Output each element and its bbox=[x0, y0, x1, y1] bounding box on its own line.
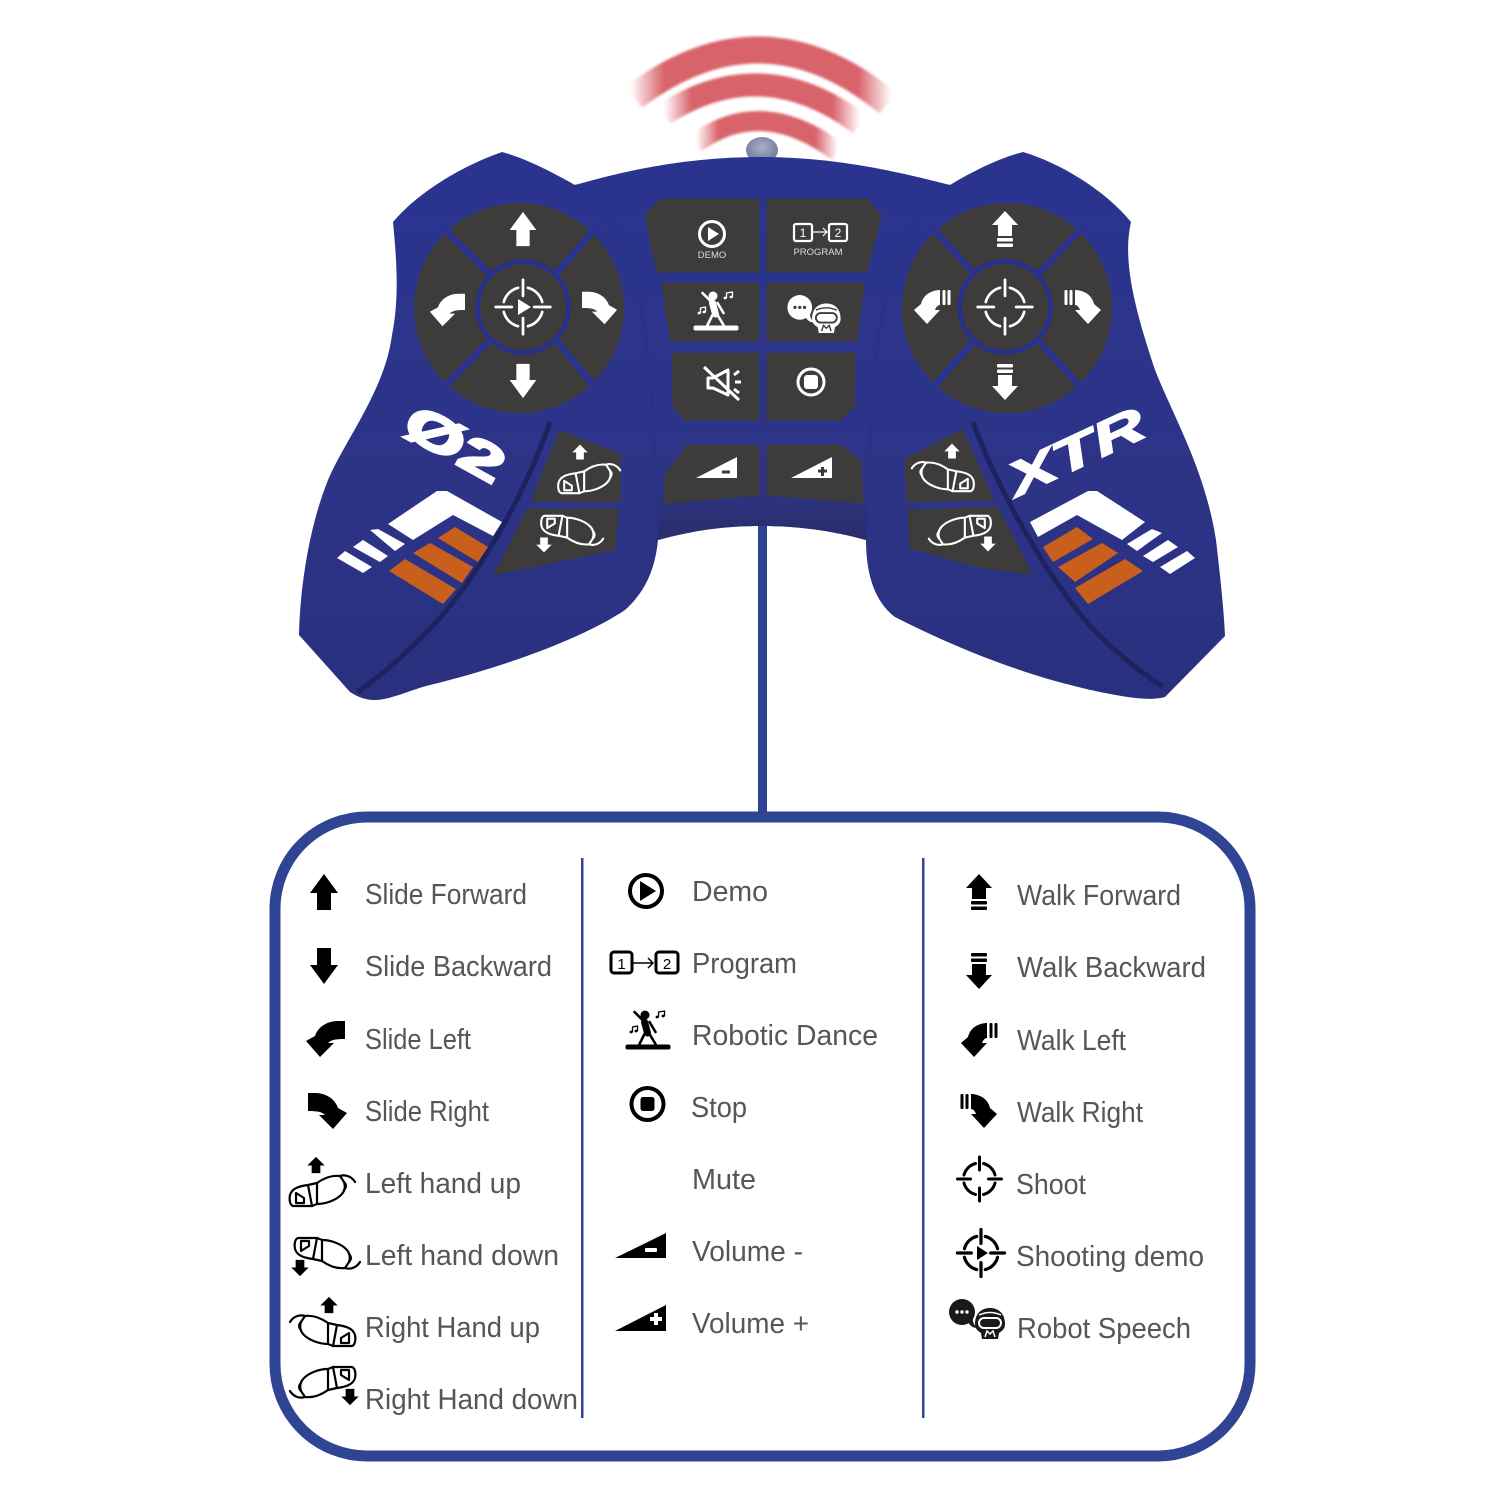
label: shooting demo: Shooting demo bbox=[1016, 1241, 1204, 1273]
right D-pad bbox=[902, 203, 1112, 413]
logo: 02: Ø2 bbox=[395, 394, 515, 495]
icon: walk backward bbox=[966, 953, 992, 989]
legend column: slide and hands bbox=[290, 874, 578, 1416]
icon: program: 2 bbox=[663, 956, 671, 973]
label: robot speech: Robot Speech bbox=[1017, 1313, 1191, 1345]
icon: slide left bbox=[306, 1021, 345, 1057]
icon: slide backward bbox=[510, 364, 536, 398]
label: slide forward: Slide Forward bbox=[365, 879, 527, 911]
left grip groove bbox=[358, 422, 550, 692]
label: slide left: Slide Left bbox=[365, 1024, 471, 1056]
label: mute: Mute bbox=[692, 1164, 756, 1196]
legend column: walk and shoot bbox=[949, 874, 1206, 1345]
connector line bbox=[758, 520, 767, 816]
icon: walk right bbox=[960, 1094, 997, 1128]
label: slide backward: Slide Backward bbox=[365, 951, 552, 983]
controller bbox=[299, 152, 1225, 700]
label: walk backward: Walk Backward bbox=[1017, 952, 1206, 984]
right grip groove bbox=[973, 422, 1163, 687]
icon: shooting demo bbox=[496, 280, 550, 334]
label: left hand up: Left hand up bbox=[365, 1168, 521, 1200]
icon: shoot bbox=[978, 280, 1032, 334]
icon: shoot bbox=[958, 1157, 1002, 1201]
label: volume up: Volume + bbox=[692, 1308, 809, 1340]
legend column: functions bbox=[611, 875, 878, 1340]
LED emitter bbox=[746, 137, 778, 163]
program button: 1 bbox=[800, 226, 807, 240]
icon: volume up bbox=[615, 1305, 666, 1331]
program button bbox=[768, 200, 880, 271]
label: slide right: Slide Right bbox=[365, 1096, 489, 1128]
label: shoot: Shoot bbox=[1016, 1169, 1086, 1201]
icon: slide right bbox=[308, 1093, 347, 1129]
demo button: DEMO bbox=[698, 250, 726, 261]
label: stop: Stop bbox=[691, 1092, 747, 1124]
right stripes bbox=[1030, 491, 1195, 604]
label: left hand down: Left hand down bbox=[365, 1240, 559, 1272]
program button: 2 bbox=[835, 226, 842, 240]
label: walk forward: Walk Forward bbox=[1017, 880, 1181, 912]
centre underside shade bbox=[658, 480, 866, 540]
label: right hand up: Right Hand up bbox=[365, 1312, 540, 1344]
icon: walk backward bbox=[992, 364, 1018, 400]
icon: walk forward bbox=[966, 874, 992, 910]
volume up button bbox=[768, 446, 862, 502]
label: program: Program bbox=[692, 948, 797, 980]
label: walk right: Walk Right bbox=[1017, 1097, 1143, 1129]
icon: left hand down bbox=[291, 1238, 360, 1276]
icon: walk right bbox=[1064, 290, 1101, 324]
icon: shooting demo bbox=[957, 1229, 1005, 1277]
icon: program bbox=[611, 952, 678, 973]
icon: program: 1 bbox=[617, 956, 626, 973]
icon: slide right bbox=[582, 292, 617, 324]
controller body bbox=[299, 152, 1225, 700]
label: walk left: Walk Left bbox=[1017, 1025, 1126, 1057]
left hand down button bbox=[496, 510, 617, 573]
logo: XTR: XTR bbox=[996, 397, 1153, 508]
icon: left hand up bbox=[290, 1157, 355, 1206]
legend panel frame bbox=[275, 817, 1250, 1456]
robot speech button bbox=[768, 284, 863, 340]
icon: slide backward bbox=[310, 948, 338, 984]
mute button bbox=[673, 354, 758, 419]
column divider left bbox=[581, 858, 584, 1418]
icon: robot speech bbox=[949, 1299, 1005, 1339]
icon: volume down bbox=[615, 1233, 666, 1258]
column divider right bbox=[922, 858, 924, 1418]
demo button bbox=[646, 200, 758, 271]
icon: stop bbox=[632, 1088, 664, 1120]
label: right hand down: Right Hand down bbox=[365, 1384, 578, 1416]
icon: walk forward bbox=[992, 211, 1018, 247]
icon: right hand down bbox=[290, 1367, 359, 1405]
volume down button bbox=[666, 446, 758, 502]
left hand up button bbox=[533, 432, 620, 501]
label: robotic dance: Robotic Dance bbox=[692, 1020, 878, 1052]
icon: slide left bbox=[430, 294, 465, 326]
robotic dance button bbox=[663, 284, 758, 340]
signal waves bbox=[634, 50, 888, 152]
icon: walk left bbox=[961, 1023, 998, 1057]
icon: slide forward bbox=[310, 874, 338, 910]
icon: right hand up bbox=[290, 1297, 355, 1346]
label: volume down: Volume - bbox=[692, 1236, 803, 1268]
icon: walk left bbox=[914, 290, 950, 324]
program button: PROGRAM bbox=[793, 247, 843, 258]
label: demo: Demo bbox=[692, 876, 768, 908]
right hand up button bbox=[906, 431, 992, 501]
left D-pad bbox=[414, 203, 624, 413]
left stripes bbox=[337, 491, 502, 604]
icon: slide forward bbox=[510, 212, 536, 246]
wing edges bbox=[575, 185, 950, 540]
icon: demo bbox=[630, 875, 662, 907]
icon: robotic dance bbox=[626, 1010, 670, 1050]
stop button bbox=[768, 354, 854, 419]
right hand down button bbox=[909, 508, 1030, 573]
